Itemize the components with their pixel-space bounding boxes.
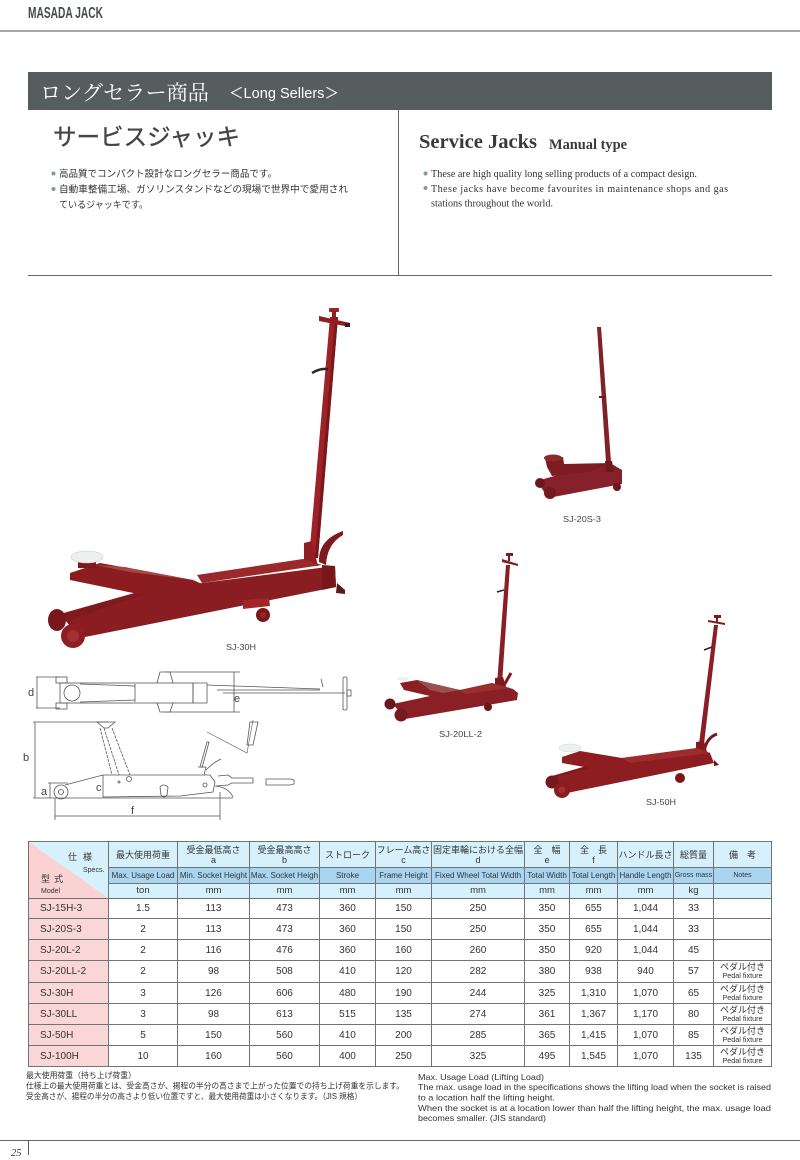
specification table: 495 [539,1050,555,1062]
specification table: ペダル付き [720,1046,765,1056]
specification table: 613 [276,1008,293,1020]
specification table: kg [688,885,699,896]
diagram: side view with dimensions a, b, c, f: b [23,752,29,764]
specification table: 1,044 [633,924,658,934]
specification table: 3 [140,1008,146,1020]
Japanese description: 自動車整備工場、ガソリンスタンドなどの現場で世界中で愛用され [59,184,348,196]
specification table: 80 [688,1008,699,1020]
Japanese description [52,168,348,211]
diagram: top view with dimensions d and e: e [234,693,240,705]
specification table: mm [277,885,292,896]
specification table: 606 [276,988,293,998]
footnote: Japanese: 受金高さが、揚程の半分の高さより低い位置ですと、最大使用荷重は小さくなります。（JIS 規格） [26,1091,362,1101]
specification table: mm [539,885,555,896]
specification table: mm [206,885,221,896]
specification table: 固定車輪における全幅 [433,845,523,855]
specification table: Pedal fixture [723,992,762,1002]
specification table: 85 [688,1030,699,1040]
specification table: f [592,855,595,865]
specification table: 受金最低高さ [186,845,240,855]
specification table: 1,070 [633,1030,658,1040]
diagram: side view with dimensions a, b, c, f: c [96,782,102,794]
photo: SJ-20LL-2 jack [384,553,518,739]
specification table: 360 [339,903,356,914]
specification table: 1,170 [633,1008,658,1020]
specification table: 160 [205,1050,222,1062]
specification table: 190 [395,988,412,998]
section banner: ロングセラー商品 [40,81,209,105]
specification table: 150 [395,903,412,914]
specification table: 2 [140,944,146,956]
specification table: 1,070 [633,988,658,998]
specification table: Min. Socket Height [180,871,247,880]
specification table: mm [586,885,601,896]
specification table: SJ-50H [40,1030,73,1040]
specification table: Max. Usage Load [112,871,174,880]
specification table: 45 [688,944,699,956]
specification table: 1,070 [633,1050,658,1062]
specification table: 仕様 [68,852,98,862]
specification table: ストローク [325,850,370,860]
specification table: 全 幅 [533,845,560,855]
specification table: 2 [140,966,146,977]
specification table: SJ-100H [40,1050,79,1062]
specification table: Pedal fixture [723,1034,762,1044]
specification table: 135 [685,1050,702,1062]
English description [424,169,728,210]
specification table: 135 [395,1008,412,1020]
specification table: mm [396,885,411,896]
specification table: Pedal fixture [723,1014,762,1022]
specification table: 総質量 [680,850,707,860]
specification table: 480 [339,988,356,998]
photo: SJ-30H jack: SJ-30H [226,642,256,652]
specification table: 274 [470,1008,486,1020]
specification table: 938 [585,966,602,977]
specification table: ハンドル長さ [618,850,672,860]
specification table: ペダル付き [720,1004,765,1014]
specification table: 1,044 [633,944,658,956]
specification table: 350 [539,924,555,934]
footnote: English: becomes smaller. (JIS standard) [418,1113,546,1123]
specification table: SJ-30H [40,988,73,998]
specification table: a [211,855,216,865]
specification table: 1,415 [581,1030,606,1040]
specification table: 65 [688,988,699,998]
specification table: d [475,855,480,865]
specification table: 126 [205,988,222,998]
specification table: 476 [276,944,293,956]
specification table: 250 [470,924,486,934]
specification table: 160 [395,944,412,956]
specification table: 508 [276,966,293,977]
specification table: 285 [470,1030,486,1040]
specification table: 400 [339,1050,356,1062]
specification table: SJ-20L-2 [40,944,81,956]
specification table: 2 [140,924,146,934]
specification table: フレーム高さ [377,845,430,855]
specification table: Total Width [527,871,567,880]
specification table: 98 [208,966,219,977]
specification table: mm [470,885,486,896]
specification table: SJ-15H-3 [40,903,82,914]
footnote: English: The max. usage load in the specifications shows the lifting load when the socket is raised [418,1082,771,1092]
specification table: ペダル付き [720,1026,765,1036]
specification table: Model [41,888,60,895]
logo: Masada Jack: MASADA JACK [28,5,104,22]
specification table: 150 [395,924,412,934]
English heading: Service Jacks [419,131,537,153]
specification table: 325 [470,1050,486,1062]
specification table: 全 長 [580,845,607,855]
page number: 25 [11,1148,22,1159]
diagram: top view with dimensions d and e [28,672,351,712]
specification table: 350 [539,903,555,914]
specification table: 244 [470,988,486,998]
specification table: 150 [205,1030,222,1040]
specification table: 940 [637,966,654,977]
specification table: 410 [339,966,356,977]
specification table: Stroke [336,871,359,880]
specification table: 410 [339,1030,356,1040]
specification table: Fixed Wheel Total Width [435,871,521,880]
specification table: 1.5 [136,903,150,914]
specification table: 260 [470,944,486,956]
diagram: side view with dimensions a, b, c, f: f [131,805,135,817]
specification table: SJ-20S-3 [40,924,82,934]
English heading: Manual type [549,137,627,153]
specification table: 250 [395,1050,412,1062]
specification table: mm [638,885,653,896]
photo: SJ-20S-3 jack: SJ-20S-3 [563,514,601,524]
specification table: 200 [395,1030,412,1040]
specification table: 250 [470,903,486,914]
specification table: 473 [276,903,293,914]
specification table: 473 [276,924,293,934]
footnote: English [418,1072,771,1123]
specification table: Total Length [572,871,615,880]
Japanese description: 高品質でコンパクト設計なロングセラー商品です。 [59,168,277,180]
footnote: English: Max. Usage Load (Lifting Load) [418,1072,544,1082]
specification table: e [544,855,550,865]
specification table: ペダル付き [720,984,765,994]
specification table: 113 [206,924,221,934]
specification table: 5 [140,1030,146,1040]
diagram: top view with dimensions d and e: d [28,687,34,699]
specification table: 325 [539,988,555,998]
specification table: 282 [470,966,486,977]
specification table: Frame Height [379,871,428,880]
photo: SJ-50H jack [546,615,725,807]
photo: SJ-20LL-2 jack: SJ-20LL-2 [439,729,482,739]
section banner: ＜Long Sellers＞ [229,85,339,102]
specification table: 33 [688,903,699,914]
specification table: 1,367 [581,1008,606,1020]
English description: These are high quality long selling products of a compact design. [431,169,697,180]
footnote: Japanese [26,1070,404,1101]
diagram: side view with dimensions a, b, c, f [23,720,294,820]
specification table: SJ-20LL-2 [40,966,86,977]
specification table: Specs. [83,867,104,874]
specification table: Pedal fixture [723,971,762,980]
footnote: English: When the socket is at a location lower than half the lifting height, the max. usage load [418,1103,771,1113]
English heading [419,131,627,153]
specification table: 98 [208,1008,219,1020]
specification table: ton [136,885,150,896]
specification table [28,841,772,1067]
specification table: 365 [539,1030,555,1040]
specification table: 120 [395,966,412,977]
specification table: Gross mass [675,872,712,879]
footnote: Japanese: 最大使用荷重（持ち上げ荷重） [26,1070,136,1080]
specification table: 655 [585,903,602,914]
specification table: 380 [539,966,555,977]
specification table: 最大使用荷重 [116,850,170,860]
specification table: 1,310 [581,988,606,998]
English description: These jacks have become favourites in maintenance shops and gas [431,184,728,195]
photo: SJ-20S-3 jack [535,327,622,524]
specification table: ペダル付き [720,962,765,972]
specification table: Notes [733,872,752,879]
diagram: side view with dimensions a, b, c, f: a [41,786,48,798]
specification table: 113 [206,903,221,914]
specification table: 33 [688,924,699,934]
specification table: c [401,855,406,865]
specification table: 10 [137,1050,149,1062]
specification table: Max. Socket Heigh [251,871,318,880]
English description: stations throughout the world. [431,198,553,210]
specification table: mm [340,885,355,896]
specification table: b [282,855,287,865]
specification table: 655 [585,924,602,934]
specification table: 型式 [41,874,67,884]
footnote: Japanese: 仕様上の最大使用荷重とは、受金高さが、揚程の半分の高さまで上がった位置での持ち上げ荷重を示します。 [26,1080,404,1090]
Japanese description: ているジャッキです。 [59,200,148,211]
Japanese heading: サービスジャッキ [53,124,240,150]
specification table: 560 [276,1050,293,1062]
specification table: 515 [339,1008,356,1020]
specification table: 361 [539,1008,555,1020]
section banner [28,72,772,110]
specification table: 57 [688,966,699,977]
specification table: 920 [585,944,602,956]
specification table: 360 [339,924,356,934]
specification table: 560 [276,1030,293,1040]
specification table: Handle Length [619,871,672,880]
specification table: 受金最高高さ [257,845,312,855]
specification table: Pedal fixture [723,1056,762,1064]
specification table: 3 [140,988,146,998]
specification table: 1,545 [581,1050,606,1062]
footnote: English: to a location half the lifting height. [418,1092,555,1102]
specification table: 360 [339,944,356,956]
specification table: 116 [206,944,221,956]
specification table: SJ-30LL [40,1008,77,1020]
photo: SJ-50H jack: SJ-50H [646,797,676,807]
specification table: 備 考 [729,850,756,860]
photo: SJ-30H jack [48,308,350,652]
specification table: 1,044 [633,903,658,914]
specification table: 350 [539,944,555,956]
